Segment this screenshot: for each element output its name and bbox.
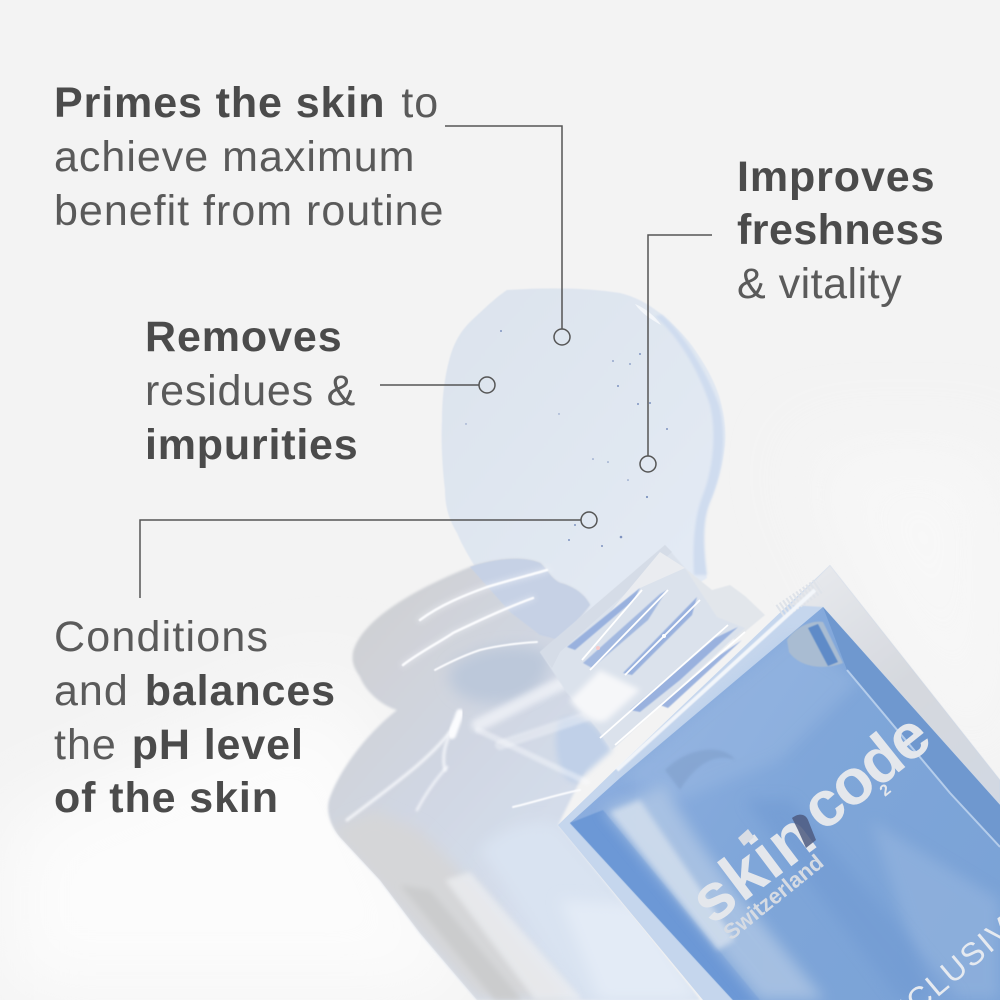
leader line: freshness [640, 235, 712, 472]
bottle shadow [328, 559, 700, 1000]
serum droplet [442, 288, 725, 636]
darker streak [762, 806, 949, 997]
callout: conditions and balances: Conditions [54, 613, 269, 661]
callout: improves freshness: freshness [737, 206, 944, 254]
back shoulder pieces [685, 568, 765, 640]
callout: removes residues: impurities [145, 421, 358, 469]
leader line: removes [380, 377, 495, 393]
glass rim [790, 565, 1000, 805]
callout: removes residues [145, 313, 358, 469]
shadow lower body details [330, 810, 700, 1000]
strip inner line [847, 670, 1000, 847]
dark reflection on n [792, 815, 816, 848]
bubble [787, 622, 843, 667]
blue patch near neck [556, 717, 612, 783]
callout: primes the skin [54, 79, 444, 235]
thread blues [567, 588, 742, 712]
callout: improves freshness: & vitality [737, 260, 902, 308]
callout: conditions and balances: the pH level [54, 721, 304, 769]
thread highlights [582, 590, 745, 745]
callout: removes residues: Removes [145, 313, 343, 361]
shadow over droplet [470, 559, 590, 640]
grooves on shoulder [780, 585, 820, 612]
brand logo: code: code [787, 699, 942, 844]
brand logo: skin: skin [676, 796, 829, 937]
bottle glass body [558, 565, 1000, 1000]
pale inner band [603, 785, 825, 1000]
subscript 2: 2 [877, 781, 895, 800]
blue liquid [570, 607, 1000, 1000]
callout: primes the skin: achieve maximum [54, 133, 416, 181]
neck reflection in liquid [666, 750, 732, 788]
bottle neck [540, 545, 745, 750]
leader line: primes [445, 126, 570, 345]
Swiss cross mark [738, 829, 754, 846]
callout: conditions and balances [54, 613, 336, 822]
textured light strip [445, 872, 583, 1000]
light caustics in shadow [347, 570, 590, 820]
callout: improves freshness: Improves [737, 153, 935, 201]
leader line: conditions [140, 512, 597, 598]
callout: conditions and balances: of the skin [54, 774, 279, 822]
dark strip in edge [408, 889, 519, 1000]
callout: removes residues: residues & [145, 367, 356, 415]
lit lower body [573, 908, 687, 996]
grey edge strip [336, 820, 537, 1000]
Switzerland tagline: Switzerland [718, 849, 828, 945]
pale body shadow [480, 823, 700, 1000]
bubble dark edge [808, 624, 838, 666]
lighter stripe [878, 831, 1000, 1000]
callout: primes the skin: Primes the skin to [54, 79, 439, 127]
shoulder highlight [617, 590, 815, 770]
callout: primes the skin: benefit from routine [54, 187, 444, 235]
callout: conditions and balances: and balances [54, 667, 336, 715]
bottle [540, 545, 1000, 1000]
callout: improves freshness [737, 153, 944, 308]
white light patch [0, 450, 1000, 1000]
deep blue left strip [570, 810, 760, 1000]
right dark strip [823, 607, 1000, 847]
liquid highlights [570, 607, 1000, 1000]
pale band core [610, 800, 735, 950]
dark neck shadow [449, 647, 548, 703]
top liquid glow [641, 646, 849, 792]
